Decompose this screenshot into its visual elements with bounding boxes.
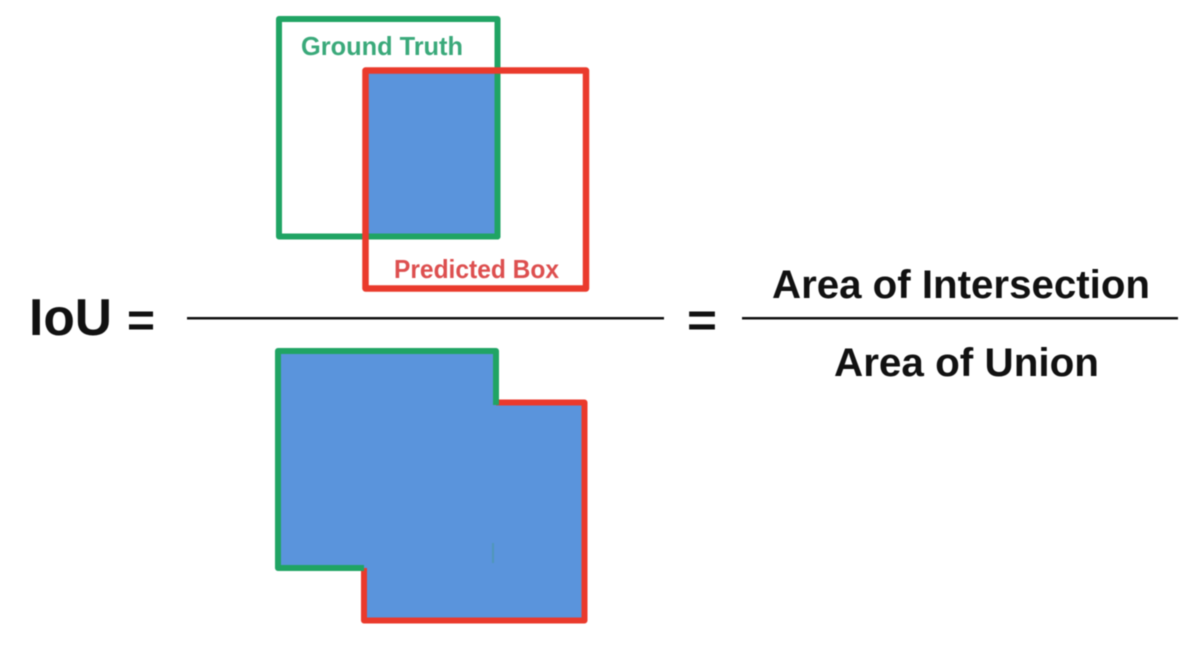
area of union label: Area of Union <box>834 341 1099 385</box>
predicted box <box>366 70 586 288</box>
IoU label: IoU <box>29 289 112 347</box>
predicted outline <box>364 402 584 620</box>
main fraction line <box>187 317 664 320</box>
right fraction line <box>742 317 1178 320</box>
numerator: overlapping boxes <box>279 19 586 288</box>
union fill <box>278 351 584 620</box>
denominator: union shape <box>278 351 584 620</box>
ground truth label: Ground Truth <box>301 31 463 61</box>
ground truth outline <box>278 351 496 568</box>
IoU label <box>29 289 155 347</box>
IoU label: = <box>127 293 155 346</box>
equals sign: = <box>687 293 717 346</box>
ground truth edge over intersection <box>369 74 498 236</box>
small artifact mark <box>492 543 494 563</box>
intersection area <box>366 71 497 236</box>
ground truth box <box>279 19 498 236</box>
area of intersection label: Area of Intersection <box>772 263 1150 307</box>
predicted box label: Predicted Box <box>394 254 560 284</box>
